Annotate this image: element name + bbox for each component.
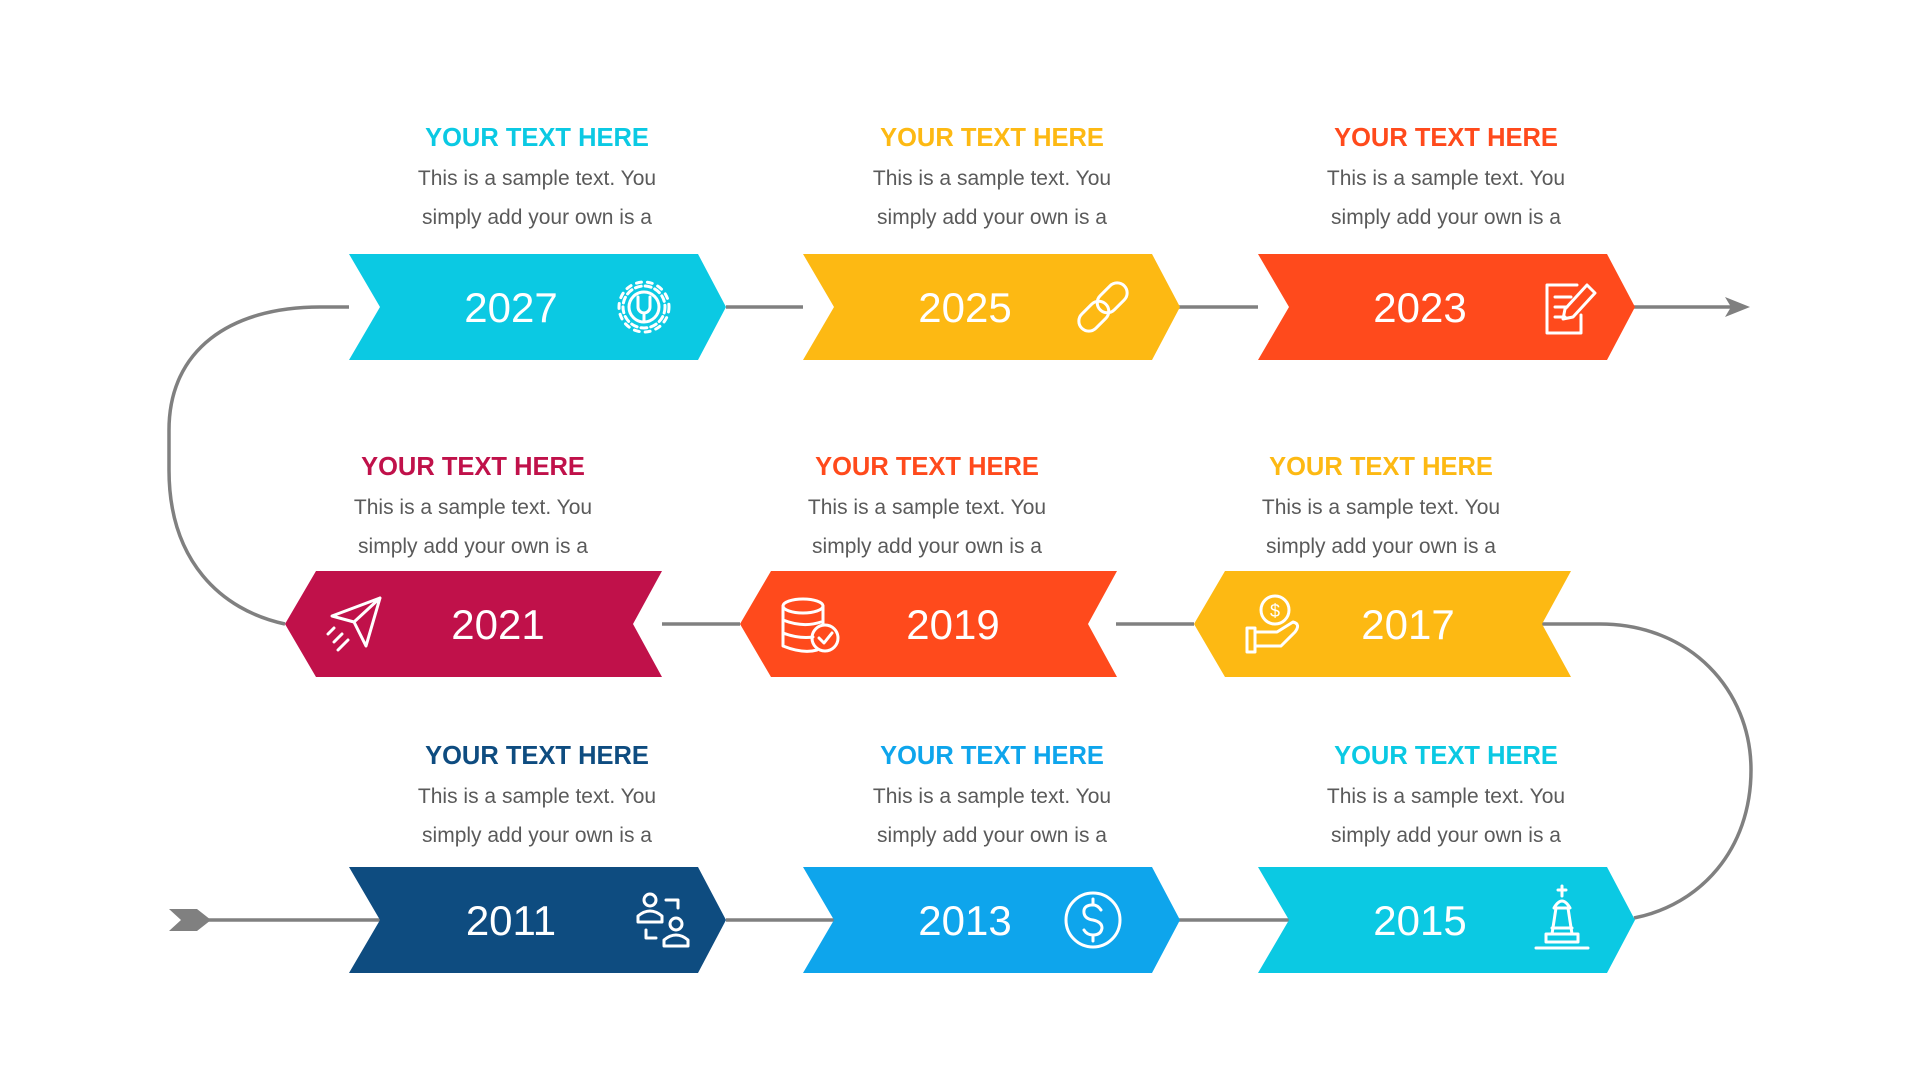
item 2023: YOUR TEXT HERE (1334, 124, 1558, 152)
icon: document pen (1547, 285, 1595, 333)
item 2017: This is a sample text. You (1262, 496, 1500, 519)
item 2015: YOUR TEXT HERE (1334, 742, 1558, 770)
item 2025 (803, 124, 1180, 360)
item 2017: YOUR TEXT HERE (1269, 453, 1493, 481)
icon: database check (783, 599, 838, 651)
item 2017: 2017 (1361, 601, 1455, 648)
item 2027: YOUR TEXT HERE (425, 124, 649, 152)
item 2019: 2019 (906, 601, 1000, 648)
item 2027: 2027 (464, 284, 558, 331)
item 2021 (285, 453, 662, 677)
item 2015: This is a sample text. You (1327, 785, 1565, 808)
item 2027: This is a sample text. You (418, 167, 656, 190)
icon: hand coin: $ (1270, 601, 1280, 621)
item 2011: 2011 (466, 897, 556, 944)
item 2013: This is a sample text. You (873, 785, 1111, 808)
item 2027 (349, 124, 726, 360)
item 2027: simply add your own is a (422, 206, 652, 229)
item 2017: simply add your own is a (1266, 535, 1496, 558)
icon: dollar circle (1066, 893, 1120, 947)
item 2017 (1194, 453, 1571, 677)
item 2011: This is a sample text. You (418, 785, 656, 808)
item 2025: YOUR TEXT HERE (880, 124, 1104, 152)
item 2025: simply add your own is a (877, 206, 1107, 229)
item 2021: 2021 (451, 601, 545, 648)
item 2019: YOUR TEXT HERE (815, 453, 1039, 481)
item 2013 (803, 742, 1180, 973)
item 2013: simply add your own is a (877, 824, 1107, 847)
item 2011 (349, 742, 726, 973)
item 2013: YOUR TEXT HERE (880, 742, 1104, 770)
item 2015 (1258, 742, 1635, 973)
icon: gear wrench (619, 282, 669, 332)
item 2019: This is a sample text. You (808, 496, 1046, 519)
item 2021: YOUR TEXT HERE (361, 453, 585, 481)
arrow: end arrowhead (1725, 297, 1750, 317)
arrow: start tail (169, 909, 211, 931)
icon: chess king (1536, 886, 1588, 948)
item 2011: simply add your own is a (422, 824, 652, 847)
timeline path (169, 307, 1751, 920)
item 2013: 2013 (918, 897, 1012, 944)
item 2011: YOUR TEXT HERE (425, 742, 649, 770)
icon: chain link (1075, 279, 1131, 335)
item 2025: This is a sample text. You (873, 167, 1111, 190)
item 2019: simply add your own is a (812, 535, 1042, 558)
item 2019 (740, 453, 1117, 677)
item 2023 (1258, 124, 1635, 360)
item 2025: 2025 (918, 284, 1012, 331)
icon: paper plane (328, 598, 380, 650)
item 2023: 2023 (1373, 284, 1467, 331)
icon: hand coin (1247, 596, 1298, 652)
item 2021: This is a sample text. You (354, 496, 592, 519)
item 2021: simply add your own is a (358, 535, 588, 558)
item 2015: 2015 (1373, 897, 1467, 944)
item 2023: This is a sample text. You (1327, 167, 1565, 190)
item 2015: simply add your own is a (1331, 824, 1561, 847)
icon: people exchange (638, 894, 688, 946)
item 2023: simply add your own is a (1331, 206, 1561, 229)
